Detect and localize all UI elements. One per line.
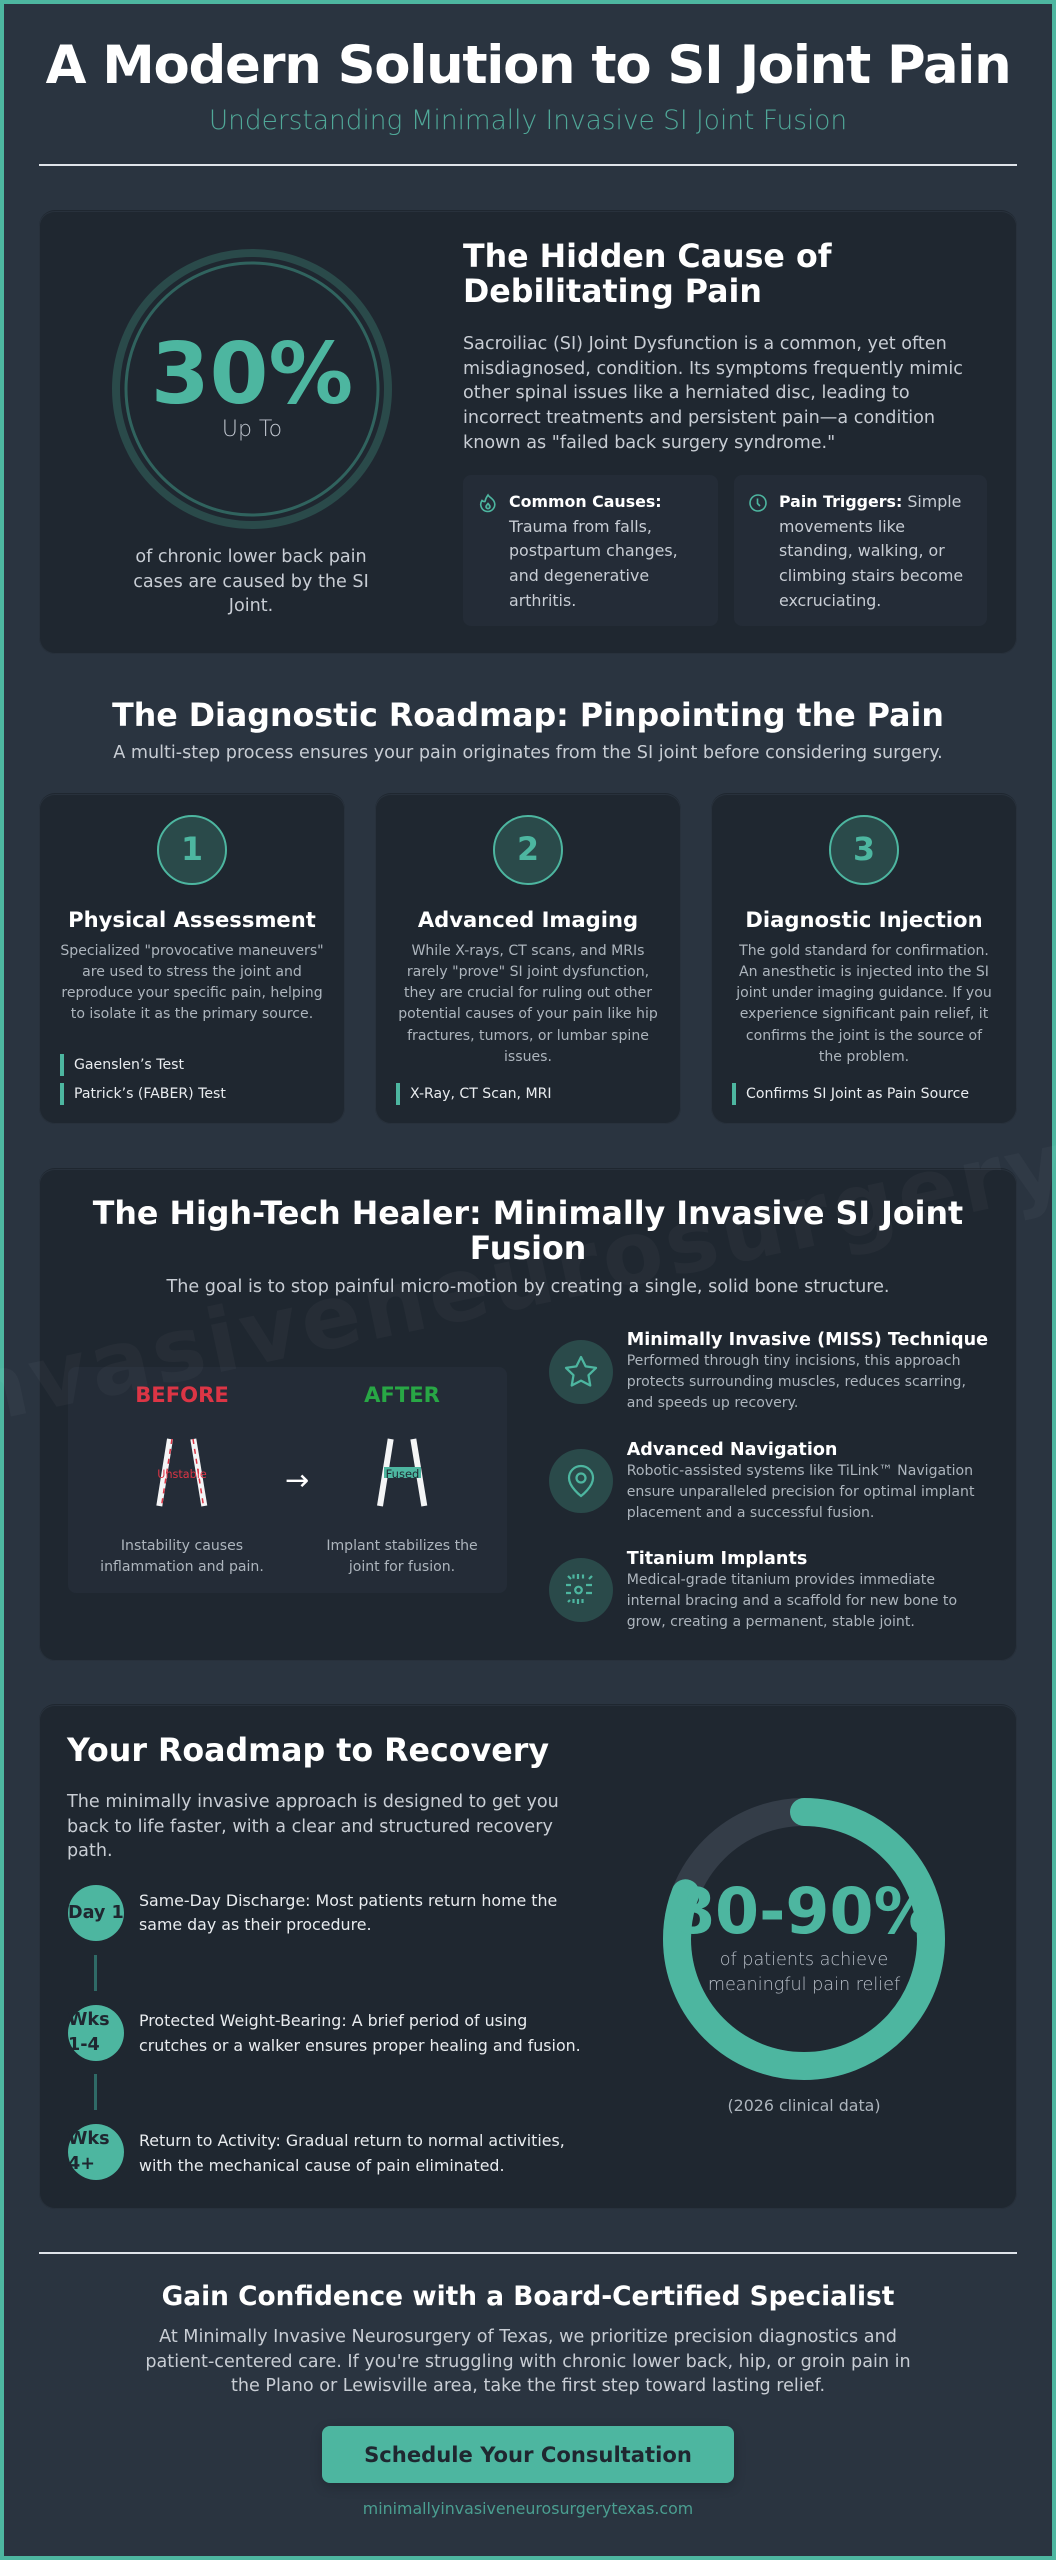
label: after: AFTER	[364, 1382, 440, 1407]
timeline badge: day 1	[68, 1885, 124, 1941]
step description: fractures, tumors, or lumbar spine	[407, 1028, 649, 1044]
donut chart: 80-90%	[663, 1798, 945, 2080]
caption: after: Implant stabilizes the	[326, 1538, 478, 1554]
diagram: joint before and after: Unstable	[157, 1468, 207, 1481]
timeline text: Return to Activity: Gradual return to normal activities,	[139, 2131, 565, 2150]
step description: to isolate it as the primary source.	[71, 1006, 313, 1022]
feature title: Advanced Navigation	[627, 1440, 837, 1460]
heading: recovery: Your Roadmap to Recovery	[67, 1733, 549, 1769]
step title: Diagnostic Injection	[745, 907, 983, 932]
feature description: protects surrounding muscles, reduces scarring,	[627, 1374, 966, 1390]
button: schedule consultation: Schedule Your Consultation	[364, 2442, 692, 2467]
icon: implant burst	[549, 1558, 613, 1622]
stat caption: Joint.	[229, 596, 273, 616]
heading: specialist: Gain Confidence with a Board-Certified Specialist	[162, 2281, 894, 2312]
feature description	[627, 1572, 957, 1630]
step title: Physical Assessment	[68, 907, 316, 932]
step description: The gold standard for confirmation.	[739, 943, 989, 959]
heading: hidden cause: Debilitating Pain	[463, 274, 762, 310]
step description: An anesthetic is injected into the SI	[739, 964, 989, 980]
text: common causes: Common Causes:	[509, 492, 662, 511]
timeline text: Protected Weight-Bearing: A brief period of using	[139, 2011, 527, 2030]
stat ring	[112, 249, 392, 529]
feature description: placement and a successful fusion.	[627, 1505, 874, 1521]
step number 2: 2	[517, 832, 539, 868]
step description	[60, 943, 324, 1022]
step description: they are crucial for ruling out other	[404, 985, 652, 1001]
heading: high-tech healer	[92, 1196, 963, 1267]
icon: star	[549, 1340, 613, 1404]
feature description: internal bracing and a scaffold for new bone to	[627, 1593, 957, 1609]
test item: Gaenslen’s Test	[74, 1057, 184, 1073]
stat: 80-90%: 80-90%	[671, 1874, 937, 1948]
feature title: Minimally Invasive (MISS) Technique	[627, 1330, 988, 1350]
website link: minimallyinvasiveneurosurgerytexas.com	[363, 2499, 693, 2518]
step number 1: 1	[181, 832, 203, 868]
panel: hidden cause	[39, 210, 1017, 654]
text: common causes: and degenerative	[509, 566, 649, 585]
test item: Confirms SI Joint as Pain Source	[746, 1086, 969, 1102]
step description: the problem.	[819, 1049, 909, 1065]
label: before: BEFORE	[135, 1382, 229, 1407]
step description	[736, 943, 992, 1065]
step description: reproduce your specific pain, helping	[61, 985, 323, 1001]
test item: Patrick’s (FABER) Test	[74, 1086, 226, 1102]
stat caption: meaningful pain relief	[708, 1975, 900, 1995]
stat: 30%: 30%	[151, 325, 353, 423]
panel: high-tech healer	[39, 1168, 1017, 1661]
feature description: Medical-grade titanium provides immediate	[627, 1572, 935, 1588]
stat caption	[708, 1950, 900, 1995]
closing text: patient-centered care. If you're struggling with chronic lower back, hip, or groin pain in	[145, 2352, 911, 2372]
text: common causes: Trauma from falls,	[509, 517, 652, 536]
feature description: ensure unparalleled precision for optimal implant	[627, 1484, 975, 1500]
diagram: joint before and after: Fused	[386, 1467, 419, 1481]
heading: hidden cause	[463, 239, 832, 310]
timeline badge: day 1: Day 1	[68, 1903, 124, 1923]
step description: joint under imaging guidance. If you	[736, 985, 992, 1001]
heading: high-tech healer: The High-Tech Healer: Minimally Invasive SI Joint	[93, 1196, 963, 1232]
feature description: Robotic-assisted systems like TiLink™ Navigation	[627, 1462, 973, 1478]
caption: before: inflammation and pain.	[100, 1559, 264, 1575]
subheading: diagnostic roadmap: A multi-step process ensures your pain originates from the SI joint before considering surgery.	[113, 743, 943, 763]
card: common causes	[463, 475, 718, 626]
closing text: At Minimally Invasive Neurosurgery of Texas, we prioritize precision diagnostics and	[159, 2327, 897, 2347]
arrow: →	[285, 1463, 309, 1497]
step number 3: 3	[853, 832, 875, 868]
stat caption	[133, 547, 369, 616]
data source: (2026 clinical data)	[727, 2096, 881, 2115]
heading: high-tech healer: Fusion	[470, 1231, 586, 1267]
timeline text: crutches or a walker ensures proper healing and fusion.	[139, 2036, 581, 2055]
step number 1	[157, 815, 227, 885]
body text: Sacroiliac (SI) Joint Dysfunction is a common, yet often	[463, 334, 947, 354]
timeline text: with the mechanical cause of pain eliminated.	[139, 2156, 505, 2175]
recovery intro: path.	[67, 1841, 113, 1861]
text: pain triggers: Pain Triggers: Simple	[779, 492, 961, 511]
step description: are used to stress the joint and	[82, 964, 302, 980]
diagram: joint before and after	[156, 1438, 428, 1506]
feature title: Titanium Implants	[627, 1548, 807, 1568]
timeline text	[139, 2131, 565, 2175]
text: common causes: postpartum changes,	[509, 541, 678, 560]
card: step 3	[711, 793, 1017, 1124]
step number 3	[829, 815, 899, 885]
subtitle: Understanding Minimally Invasive SI Joint Fusion	[209, 105, 847, 136]
recovery intro: The minimally invasive approach is designed to get you	[67, 1792, 559, 1812]
before and after diagram	[68, 1367, 507, 1593]
body text	[463, 334, 963, 453]
icon: clock	[749, 494, 767, 512]
body text: known as "failed back surgery syndrome."	[463, 433, 835, 453]
step description	[398, 943, 658, 1065]
test item: X-Ray, CT Scan, MRI	[410, 1086, 552, 1102]
panel: roadmap to recovery	[39, 1704, 1017, 2209]
icon: flame	[480, 494, 496, 512]
feature description: grow, creating a permanent, stable joint.	[627, 1614, 915, 1630]
feature description: and speeds up recovery.	[627, 1395, 798, 1411]
body text: misdiagnosed, condition. Its symptoms frequently mimic	[463, 359, 963, 379]
timeline text: same day as their procedure.	[139, 1915, 372, 1934]
card: pain triggers	[734, 475, 987, 626]
stat caption: of patients achieve	[720, 1950, 888, 1970]
button: schedule consultation	[322, 2426, 734, 2483]
stat caption: of chronic lower back pain	[135, 547, 367, 567]
recovery intro: back to life faster, with a clear and structured recovery	[67, 1817, 553, 1837]
timeline badge: weeks 1-4	[68, 2005, 124, 2061]
text: common causes: arthritis.	[509, 591, 576, 610]
heading: hidden cause: The Hidden Cause of	[463, 239, 831, 275]
timeline badge: weeks 4+	[68, 2124, 124, 2180]
text: pain triggers: climbing stairs become	[779, 566, 963, 585]
step description: potential causes of your pain like hip	[398, 1006, 658, 1022]
step description: issues.	[504, 1049, 552, 1065]
text: common causes	[508, 492, 678, 610]
step description: rarely "prove" SI joint dysfunction,	[407, 964, 649, 980]
closing text: the Plano or Lewisville area, take the first step toward lasting relief.	[231, 2376, 825, 2396]
caption: after	[326, 1538, 478, 1575]
icon: map pin	[549, 1449, 613, 1513]
feature description	[627, 1462, 975, 1521]
text: pain triggers: excruciating.	[779, 591, 881, 610]
text: pain triggers	[779, 492, 963, 610]
step title: Advanced Imaging	[418, 907, 638, 932]
feature description: Performed through tiny incisions, this approach	[627, 1353, 961, 1369]
caption: before: Instability causes	[121, 1538, 243, 1554]
caption: after: joint for fusion.	[349, 1559, 455, 1575]
timeline badge: weeks 1-4: 1-4	[68, 2035, 100, 2055]
stat label: up to: Up To	[222, 417, 282, 442]
text: pain triggers: movements like	[779, 517, 905, 536]
card: step 1	[39, 793, 345, 1124]
subheading: fusion goal: The goal is to stop painful micro-motion by creating a single, solid bone structure.	[166, 1277, 890, 1297]
timeline text	[139, 2011, 581, 2055]
step description: experience significant pain relief, it	[740, 1006, 988, 1022]
heading: diagnostic roadmap: The Diagnostic Roadmap: Pinpointing the Pain	[112, 698, 944, 734]
step description: confirms the joint is the source of	[746, 1028, 982, 1044]
step number 2	[493, 815, 563, 885]
body text: incorrect treatments and persistent pain—a condition	[463, 408, 935, 428]
step description: Specialized "provocative maneuvers"	[60, 943, 324, 959]
title: A Modern Solution to SI Joint Pain	[46, 35, 1010, 96]
timeline text: Same-Day Discharge: Most patients return home the	[139, 1890, 557, 1910]
timeline badge: weeks 1-4: Wks	[68, 2010, 110, 2030]
timeline text	[139, 1890, 557, 1934]
stat caption: cases are caused by the SI	[133, 572, 369, 592]
caption: before	[100, 1538, 264, 1575]
feature description	[627, 1353, 966, 1411]
recovery intro	[66, 1792, 559, 1861]
step description: While X-rays, CT scans, and MRIs	[411, 943, 645, 959]
timeline badge: weeks 4+: Wks	[68, 2129, 110, 2149]
card: step 2	[375, 793, 681, 1124]
text: pain triggers: standing, walking, or	[779, 541, 945, 560]
closing text	[145, 2327, 911, 2396]
body text: other spinal issues like a herniated disc, leading to	[463, 383, 910, 403]
timeline badge: weeks 4+: 4+	[68, 2154, 95, 2174]
